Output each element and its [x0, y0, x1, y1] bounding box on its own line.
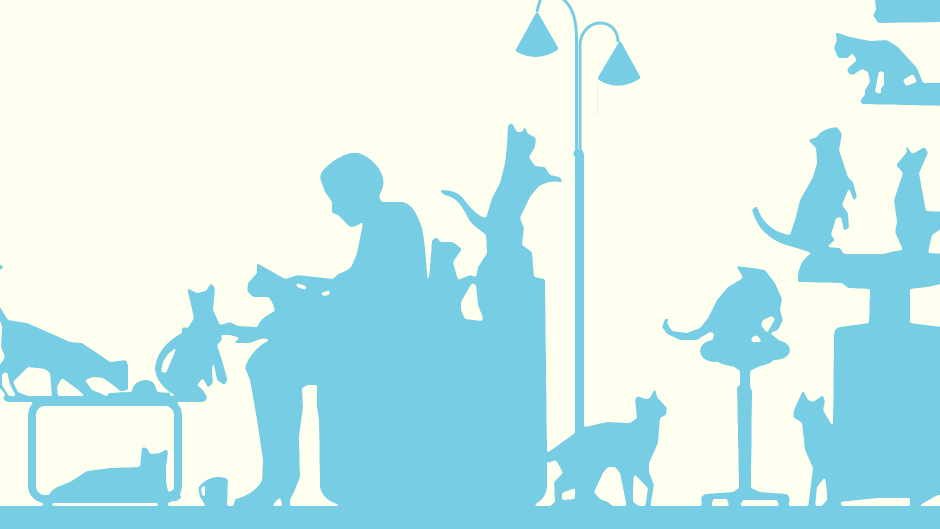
gaps in top right cat — [875, 71, 917, 94]
sitting cat on table — [155, 283, 227, 397]
woman in armchair with cats — [220, 123, 563, 510]
cat tower with two cats — [752, 127, 940, 508]
lamp arms — [537, 0, 618, 150]
table with shelf — [3, 380, 207, 508]
top right cat on shelf — [834, 32, 940, 106]
gap under walking cat — [562, 488, 575, 500]
gaps in stool cat — [751, 316, 775, 342]
mug — [198, 477, 228, 508]
lamp shades and pole — [515, 11, 641, 440]
floor — [0, 506, 940, 529]
gap in sitting cat — [161, 347, 177, 373]
cat eating on table — [0, 262, 128, 397]
walking cat — [547, 388, 667, 508]
gap in cat leg — [2, 372, 16, 396]
cat under table — [50, 447, 182, 502]
cat on stool — [662, 266, 790, 508]
faint lamp line — [596, 80, 598, 115]
top right shelf — [873, 0, 940, 23]
gaps in woman group — [296, 283, 483, 321]
